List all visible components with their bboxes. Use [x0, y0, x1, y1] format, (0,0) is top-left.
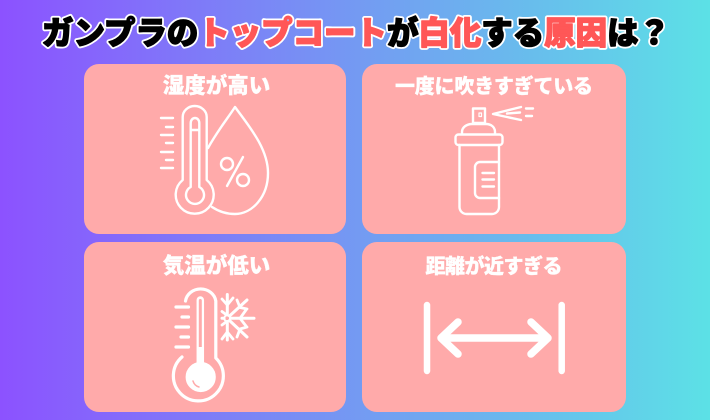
panel: sprayed too much at once	[362, 64, 626, 234]
icon: double arrow between bars	[427, 305, 562, 371]
panel: distance too close	[362, 242, 626, 412]
heading: distance too close: 距離が近すぎる	[426, 254, 562, 278]
panel: low temperature	[84, 242, 346, 412]
icon: thermometer and snowflake	[173, 289, 254, 401]
icon: spray can	[456, 107, 533, 214]
icon: thermometer and water drop	[161, 106, 268, 214]
panel: high humidity	[84, 64, 346, 234]
heading: low temperature: 気温が低い	[163, 253, 270, 278]
heading: sprayed too much at once: 一度に吹きすぎている	[395, 74, 593, 98]
heading: high humidity: 湿度が高い	[163, 73, 270, 98]
title: ガンプラのトップコートが白化する原因は？	[42, 15, 670, 51]
title: ガンプラのトップコートが白化する原因は？	[42, 15, 670, 51]
